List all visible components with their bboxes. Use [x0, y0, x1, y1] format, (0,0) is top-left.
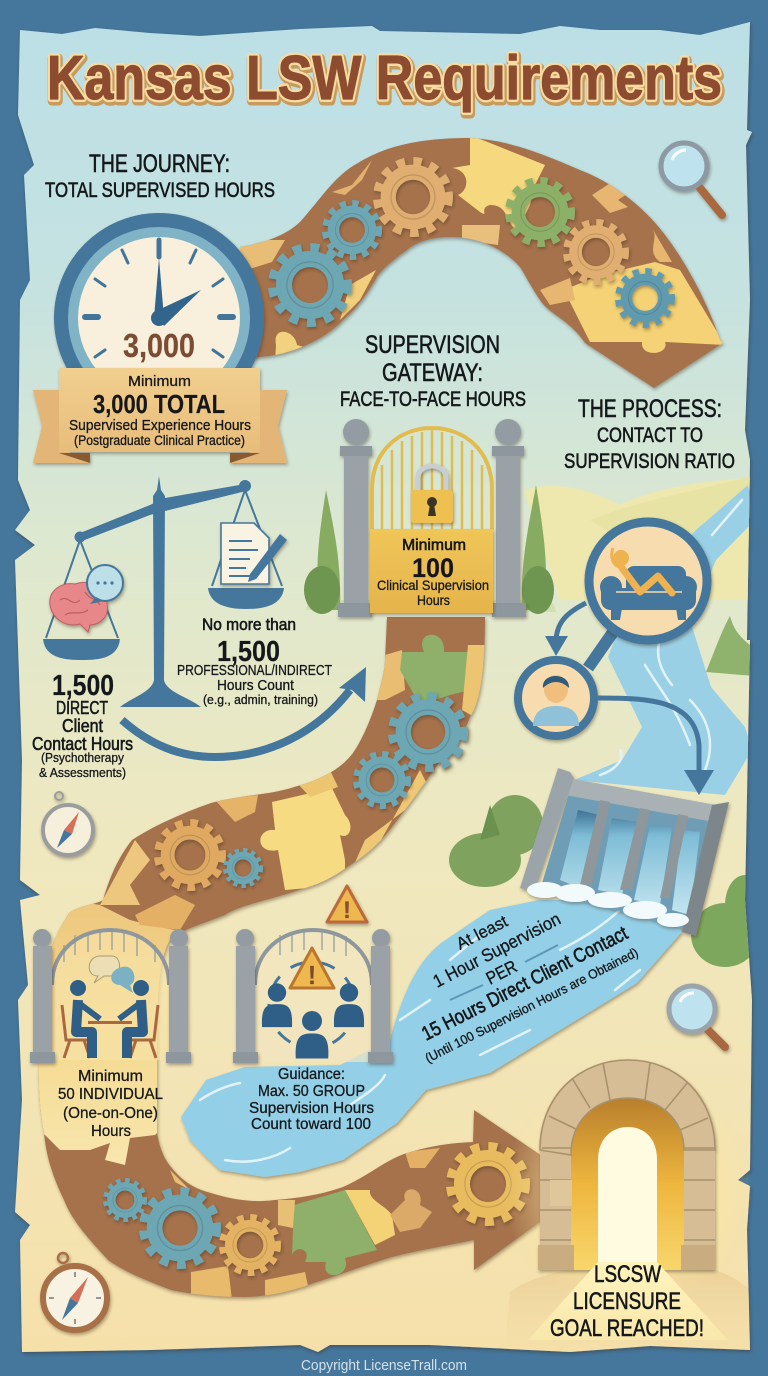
text — [58, 1068, 163, 1140]
icon: warning — [290, 948, 334, 990]
puzzle pieces lower — [30, 635, 490, 1300]
circle: clinician — [518, 660, 594, 736]
balance scale — [43, 476, 287, 707]
pillars — [30, 929, 191, 1063]
heading: supervision gateway — [340, 331, 526, 411]
text: (One-on-One) — [63, 1105, 158, 1122]
icon: brain — [50, 565, 123, 632]
gate plaque: Minimum — [402, 537, 466, 554]
gate: individual supervision — [30, 928, 191, 1140]
text: indirect hours — [177, 615, 332, 707]
plants — [304, 485, 554, 614]
heading: the journey — [45, 150, 275, 202]
gate plaque: Hours — [417, 592, 450, 608]
gears top — [274, 163, 671, 324]
heading: the process: CONTACT TO — [597, 424, 703, 447]
text — [249, 1066, 374, 1133]
gate bars — [372, 428, 492, 530]
banner: 3000 total: Supervised Experience Hours — [69, 417, 251, 434]
heading: supervision gateway: GATEWAY: — [382, 359, 483, 387]
gears lower — [106, 698, 524, 1272]
circle: client on couch — [589, 522, 707, 640]
copyright: Copyright LicenseTrall.com — [301, 1357, 467, 1374]
arrow: clinician to dam — [598, 698, 714, 795]
warning sign: ! — [343, 897, 351, 924]
heading: the process — [564, 395, 735, 473]
icon: group circle — [262, 962, 364, 1058]
puzzle pieces top — [240, 135, 725, 362]
text: indirect hours: No more than — [202, 615, 296, 634]
foam — [527, 882, 689, 927]
text: direct hours: Contact Hours — [32, 734, 133, 754]
text: indirect hours: PROFESSIONAL/INDIRECT — [177, 663, 332, 679]
arch — [52, 928, 169, 1060]
heading: supervision gateway: SUPERVISION — [365, 331, 500, 359]
text: Supervision Hours — [249, 1100, 374, 1117]
heading: the process: THE PROCESS: — [578, 395, 722, 423]
winding path middle and bottom arrow — [30, 617, 588, 1300]
stone archway — [538, 1060, 715, 1270]
banner: 3000 total: 3,000 TOTAL — [93, 389, 225, 419]
hills — [524, 475, 755, 676]
arch — [255, 928, 372, 1062]
text: direct hours: 1,500 — [52, 670, 114, 702]
goal text — [550, 1261, 704, 1342]
glow — [503, 1065, 753, 1315]
pillars — [338, 419, 526, 617]
banner: 3000 total: Minimum — [128, 373, 191, 390]
text: direct hours: & Assessments) — [39, 765, 126, 780]
icon: warning: ! — [308, 960, 316, 990]
gate: group supervision — [233, 928, 393, 1133]
banner: 3000 total: (Postgraduate Clinical Practice) — [74, 433, 245, 448]
icon: small compass — [43, 792, 93, 855]
goal text: GOAL REACHED! — [550, 1315, 704, 1342]
river text: At least — [453, 912, 511, 954]
icon: large compass — [43, 1253, 107, 1330]
banner: 3000 total — [33, 368, 287, 463]
light cone — [528, 1262, 728, 1340]
text: direct hours — [32, 670, 133, 780]
ground — [509, 1270, 749, 1308]
text: Hours — [91, 1123, 131, 1140]
gate plaque: Clinical Supervision — [377, 577, 489, 593]
text: Count toward 100 — [251, 1116, 371, 1133]
text: indirect hours: (e.g., admin, training) — [203, 693, 318, 707]
text: direct hours: Client — [62, 716, 103, 736]
goal text: LICENSURE — [573, 1288, 681, 1315]
text: direct hours: (Psychotherapy — [41, 750, 124, 765]
curved arrow — [122, 667, 366, 757]
text: Minimum — [78, 1068, 143, 1085]
river text: PER — [483, 956, 520, 989]
icon: two people at a table — [62, 956, 158, 1058]
gate plaque — [370, 529, 493, 613]
text: indirect hours: 1,500 — [217, 636, 280, 668]
heading: the journey: TOTAL SUPERVISED HOURS — [45, 179, 275, 202]
clock — [54, 213, 264, 423]
river text: (Until 100 Supervision Hours are Obtained) — [423, 945, 641, 1066]
river lower — [181, 900, 690, 1177]
text: 50 INDIVIDUAL — [58, 1086, 163, 1103]
text: Max. 50 GROUP — [258, 1083, 365, 1100]
text: Guidance: — [278, 1066, 345, 1083]
gate plaque: 100 — [412, 553, 454, 583]
arrow: couch to clinician — [545, 603, 586, 656]
padlock — [411, 466, 453, 523]
icon: couch — [600, 548, 697, 620]
river text: 15 Hours Direct Client Contact — [418, 922, 632, 1045]
clock hands — [154, 258, 201, 326]
icon: magnifier lower — [669, 986, 725, 1047]
river text: 1 Hour Supervision — [430, 909, 564, 992]
heading: supervision gateway: FACE-TO-FACE HOURS — [340, 388, 526, 411]
connector between circles — [588, 625, 618, 668]
text: direct hours: DIRECT — [56, 698, 108, 718]
bushes around dam — [449, 795, 765, 967]
pillars — [233, 929, 393, 1063]
river upper — [574, 485, 755, 795]
clock: 3,000 — [123, 327, 195, 364]
winding path top arrow — [240, 135, 725, 388]
supervision gate — [304, 419, 556, 617]
icon: magnifier top — [661, 143, 722, 215]
heading: the journey: THE JOURNEY: — [89, 150, 230, 178]
text: indirect hours: Hours Count — [217, 678, 294, 694]
warning sign — [327, 886, 367, 924]
icon: document and pen — [221, 523, 287, 584]
goal text: LSCSW — [594, 1261, 661, 1288]
dam — [520, 768, 729, 936]
